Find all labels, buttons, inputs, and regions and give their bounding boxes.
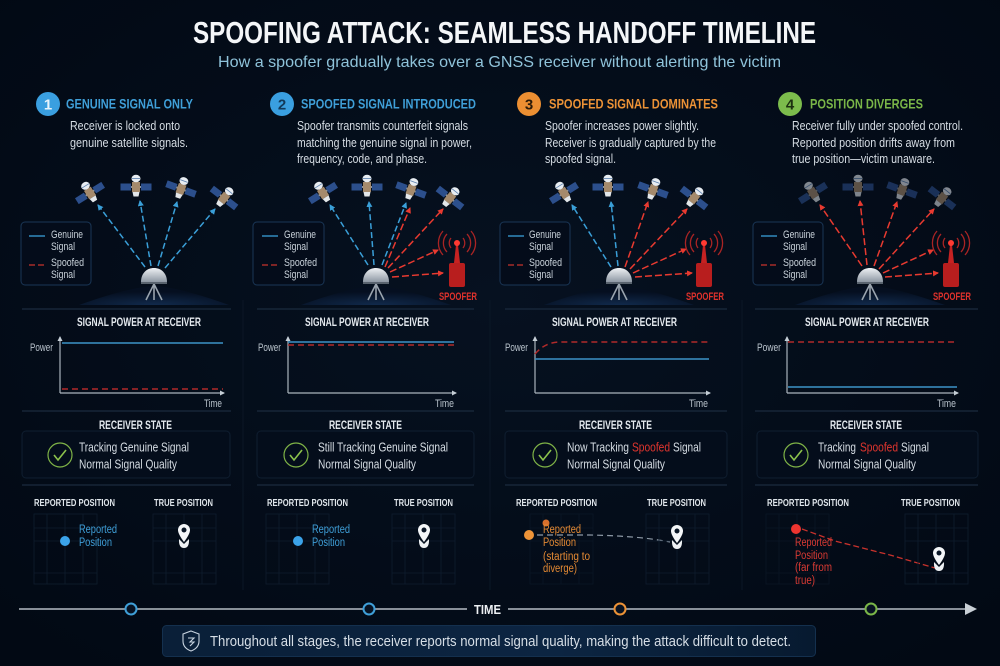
panel: stage 1 genuine signal only bbox=[21, 92, 244, 584]
stage 4 true position map: TRUE POSITION bbox=[901, 497, 960, 509]
stage 1 power chart: Time bbox=[204, 398, 222, 410]
stage 2 reported position map: Reported bbox=[312, 524, 350, 536]
stage 1 receiver state box: Tracking Genuine Signal bbox=[79, 440, 189, 454]
stage 1 legend: Genuine bbox=[51, 229, 83, 241]
stage 3 receiver state box bbox=[505, 431, 727, 478]
stage 3 receiver state heading: RECEIVER STATE bbox=[579, 420, 652, 432]
stage 4 badge: 4 bbox=[786, 96, 795, 114]
stage 1 signal arrows bbox=[98, 201, 215, 268]
stage 1 power chart bbox=[30, 337, 224, 410]
timeline node 3 bbox=[614, 604, 626, 614]
stage 4 reported position map: REPORTED POSITION bbox=[767, 497, 849, 509]
stage 2 true position map bbox=[392, 497, 455, 584]
stage 3 receiver state box: Signal bbox=[673, 440, 701, 454]
stage 1 reported position map: Reported bbox=[79, 524, 117, 536]
stage 1 true position map: TRUE POSITION bbox=[154, 497, 213, 509]
stage 4 spoofer bbox=[932, 231, 971, 303]
stage 4 true position map bbox=[901, 497, 968, 584]
stage 4 reported position map bbox=[766, 497, 935, 587]
stage 3 legend bbox=[500, 222, 570, 285]
stage 4 legend: Genuine bbox=[783, 229, 815, 241]
stage 1 legend: Signal bbox=[51, 269, 75, 281]
stage 4 description: Receiver fully under spoofed control. bbox=[792, 119, 963, 133]
stage 4 receiver state heading: RECEIVER STATE bbox=[830, 420, 902, 432]
stage 1 receiver state heading: RECEIVER STATE bbox=[99, 420, 172, 432]
timeline node 2 bbox=[364, 604, 374, 614]
stage 4 power chart bbox=[757, 337, 958, 410]
stage 3 legend: Spoofed bbox=[529, 257, 562, 269]
stage 2 reported position map bbox=[266, 497, 350, 584]
stage 1 badge: 1 bbox=[44, 96, 52, 114]
stage 2 description bbox=[297, 119, 472, 166]
stage 4 receiver state box: Signal bbox=[901, 440, 929, 454]
stage 3 spoofer: SPOOFER bbox=[686, 291, 724, 303]
stage 2 receiver state heading: RECEIVER STATE bbox=[329, 420, 402, 432]
stage 4 receiver state box bbox=[757, 431, 978, 478]
stage 4 heading: POSITION DIVERGES bbox=[810, 96, 923, 112]
stage 3 receiver antenna bbox=[544, 268, 694, 305]
timeline arrow bbox=[19, 602, 977, 617]
stage 3 reported position map: (starting to bbox=[543, 551, 590, 563]
stage 2 power chart: Power bbox=[258, 342, 281, 354]
stage 2 reported position map: REPORTED POSITION bbox=[267, 497, 348, 509]
stage 3 legend: Genuine bbox=[529, 229, 561, 241]
stage 3 power heading: SIGNAL POWER AT RECEIVER bbox=[552, 317, 678, 329]
stage 1 heading: GENUINE SIGNAL ONLY bbox=[66, 96, 194, 112]
stage 3 receiver state box: Normal Signal Quality bbox=[567, 456, 665, 472]
stage 4 reported position map: (far from bbox=[795, 562, 832, 574]
stage 2 receiver state box bbox=[257, 431, 474, 478]
stage 2 power chart bbox=[258, 337, 456, 410]
stage 3 description: spoofed signal. bbox=[545, 152, 616, 166]
stage 4 signal arrows bbox=[820, 201, 938, 277]
stage 3 description bbox=[545, 119, 716, 166]
stage 2 description: frequency, code, and phase. bbox=[297, 152, 427, 166]
stage 1 description: genuine satellite signals. bbox=[70, 136, 188, 150]
stage 3 legend: Signal bbox=[529, 269, 553, 281]
stage 1 reported position map: REPORTED POSITION bbox=[34, 497, 115, 509]
stage 3 legend: Signal bbox=[529, 241, 553, 253]
callout banner bbox=[162, 626, 816, 656]
stage 2 spoofer bbox=[438, 231, 477, 303]
stage 2 receiver antenna bbox=[301, 268, 451, 305]
stage 1 reported position map bbox=[34, 497, 117, 584]
stage 2 reported position map: Position bbox=[312, 537, 345, 549]
stage 3 reported position map: diverge) bbox=[543, 563, 577, 575]
stage 4 receiver state box: Tracking bbox=[818, 440, 856, 454]
stage 1 legend: Spoofed bbox=[51, 257, 84, 269]
stage 1 badge bbox=[36, 92, 60, 116]
stage 3 reported position map bbox=[516, 497, 670, 584]
stage 4 description: Reported position drifts away from bbox=[792, 136, 955, 150]
stage 1 receiver state box: Normal Signal Quality bbox=[79, 456, 177, 472]
stage 4 receiver antenna bbox=[795, 268, 945, 305]
stage 3 reported position map: Reported bbox=[543, 524, 581, 536]
stage 1 description: Receiver is locked onto bbox=[70, 119, 180, 133]
stage 3 satellites bbox=[544, 173, 714, 215]
stage 3 spoofer bbox=[685, 231, 724, 303]
stage 4 reported position map: Reported bbox=[795, 537, 832, 549]
stage 4 legend: Spoofed bbox=[783, 257, 816, 269]
stage 4 description: true position—victim unaware. bbox=[792, 152, 935, 166]
stage 3 true position map bbox=[646, 497, 709, 584]
stage 3 reported position map: REPORTED POSITION bbox=[516, 497, 597, 509]
stage 2 legend: Genuine bbox=[284, 229, 316, 241]
timeline node 4 bbox=[866, 604, 876, 614]
stage 2 heading: SPOOFED SIGNAL INTRODUCED bbox=[301, 96, 476, 112]
stage 2 signal arrows bbox=[330, 202, 443, 277]
stage 4 legend: Signal bbox=[783, 241, 807, 253]
stage 4 reported position map: Position bbox=[795, 550, 828, 562]
stage 2 badge: 2 bbox=[278, 96, 286, 114]
stage 4 satellites bbox=[793, 173, 962, 215]
stage 1 description bbox=[70, 119, 188, 150]
stage 2 true position map: TRUE POSITION bbox=[394, 497, 453, 509]
stage 3 heading: SPOOFED SIGNAL DOMINATES bbox=[549, 96, 718, 112]
stage 3 description: Receiver is gradually captured by the bbox=[545, 136, 716, 150]
stage 2 power heading: SIGNAL POWER AT RECEIVER bbox=[305, 317, 430, 329]
stage 3 receiver state box: Spoofed bbox=[632, 440, 670, 454]
stage 1 true position map bbox=[153, 497, 216, 584]
stage 4 power chart: Time bbox=[937, 398, 956, 410]
stage 3 badge: 3 bbox=[525, 96, 533, 114]
stage 2 legend: Spoofed bbox=[284, 257, 317, 269]
stage 4 legend bbox=[753, 222, 823, 285]
stage 2 legend: Signal bbox=[284, 241, 308, 253]
stage 4 reported position map: true) bbox=[795, 575, 815, 587]
stage 3 reported position map: Position bbox=[543, 537, 576, 549]
stage 2 description: Spoofer transmits counterfeit signals bbox=[297, 119, 468, 133]
stage 2 description: matching the genuine signal in power, bbox=[297, 136, 472, 150]
panel: stage 2 spoofed signal introduced bbox=[253, 92, 477, 584]
stage 1 satellites bbox=[70, 172, 244, 215]
callout text: Throughout all stages, the receiver reports normal signal quality, making the attack difficult to detect. bbox=[210, 634, 791, 650]
timeline label: TIME bbox=[474, 602, 501, 617]
stage 2 legend bbox=[253, 222, 324, 285]
panel: stage 4 position diverges bbox=[753, 92, 978, 587]
stage 3 signal arrows bbox=[572, 202, 692, 277]
stage 4 power chart: Power bbox=[757, 342, 781, 354]
stage 1 reported position map: Position bbox=[79, 537, 112, 549]
stage 1 receiver state box bbox=[22, 431, 230, 478]
stage 2 power chart: Time bbox=[435, 398, 454, 410]
stage 1 power chart: Power bbox=[30, 342, 53, 354]
stage 3 receiver state box: Now Tracking bbox=[567, 440, 629, 454]
stage 4 power heading: SIGNAL POWER AT RECEIVER bbox=[805, 317, 930, 329]
stage 3 power chart: Time bbox=[689, 398, 708, 410]
stage 2 legend: Signal bbox=[284, 269, 308, 281]
stage 3 description: Spoofer increases power slightly. bbox=[545, 119, 699, 133]
stage 3 power chart bbox=[505, 337, 710, 410]
stage 1 legend bbox=[21, 222, 91, 285]
subtitle: How a spoofer gradually takes over a GNSS receiver without alerting the victim bbox=[218, 54, 781, 71]
stage 2 badge bbox=[270, 92, 294, 116]
stage 4 receiver state box: Normal Signal Quality bbox=[818, 456, 916, 472]
stage 4 badge bbox=[778, 92, 802, 116]
panel: stage 3 spoofed signal dominates bbox=[500, 92, 727, 584]
title: SPOOFING ATTACK: SEAMLESS HANDOFF TIMELINE bbox=[193, 15, 816, 50]
stage 1 power heading: SIGNAL POWER AT RECEIVER bbox=[77, 317, 202, 329]
stage 4 legend: Signal bbox=[783, 269, 807, 281]
stage 2 receiver state box: Still Tracking Genuine Signal bbox=[318, 440, 448, 454]
stage 1 legend: Signal bbox=[51, 241, 75, 253]
stage 2 satellites bbox=[303, 173, 470, 215]
icon: shield bbox=[183, 631, 199, 651]
timeline node 1 bbox=[126, 604, 136, 614]
stage 2 spoofer: SPOOFER bbox=[439, 291, 477, 303]
stage 1 receiver antenna bbox=[79, 268, 229, 305]
stage 3 badge bbox=[517, 92, 541, 116]
stage 4 description bbox=[792, 119, 963, 166]
stage 2 receiver state box: Normal Signal Quality bbox=[318, 456, 416, 472]
stage 3 power chart: Power bbox=[505, 342, 528, 354]
stage 4 spoofer: SPOOFER bbox=[933, 291, 971, 303]
stage 4 receiver state box: Spoofed bbox=[860, 440, 898, 454]
stage 3 true position map: TRUE POSITION bbox=[647, 497, 706, 509]
